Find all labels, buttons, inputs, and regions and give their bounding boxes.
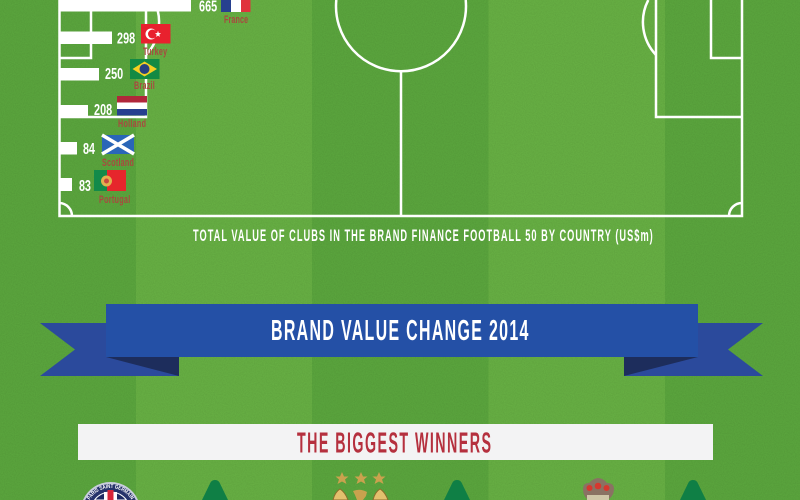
bar row: Scotland: 84	[83, 140, 95, 157]
bar row: Turkey	[59, 24, 170, 57]
bar row: Holland: 208	[94, 101, 113, 118]
chart caption: TOTAL VALUE OF CLUBS IN THE BRAND FINANCE FOOTBALL 50 BY COUNTRY (US$m)	[193, 226, 653, 245]
panel: the biggest winners header	[78, 424, 713, 460]
bar row: Turkey: 298	[117, 30, 136, 47]
bar row: Portugal: Portugal	[99, 194, 130, 205]
ribbon left tail	[40, 323, 179, 376]
bar row: Portugal: 83	[79, 177, 91, 194]
icon: green up arrow 1	[202, 480, 228, 500]
bar chart: club value by country	[59, 0, 250, 205]
banner heading: BRAND VALUE CHANGE 2014	[271, 314, 528, 346]
icon: Manchester City crest	[333, 472, 388, 500]
icon: green up arrow 3	[680, 480, 706, 500]
bar row: Holland: Holland	[118, 118, 146, 129]
bar row: Brazil: 250	[105, 65, 123, 82]
pitch markings	[60, 0, 742, 216]
bar row: Holland	[59, 96, 147, 129]
winners heading: THE BIGGEST WINNERS	[297, 427, 491, 459]
bar row: Brazil	[59, 59, 160, 91]
bar row: Scotland: Scotland	[102, 157, 134, 168]
bar row: France: France	[224, 14, 248, 25]
icon: green up arrow 2	[444, 480, 470, 500]
ribbon banner: brand value change	[40, 304, 763, 376]
bar row: France	[59, 0, 250, 25]
ribbon right tail	[624, 323, 763, 376]
bar row: Turkey: Turkey	[143, 46, 168, 57]
icon: Real Madrid crest	[583, 478, 614, 500]
bar row: Brazil: Brazil	[134, 80, 155, 91]
bar row: Portugal	[59, 170, 130, 205]
bar row: Scotland	[59, 135, 134, 168]
